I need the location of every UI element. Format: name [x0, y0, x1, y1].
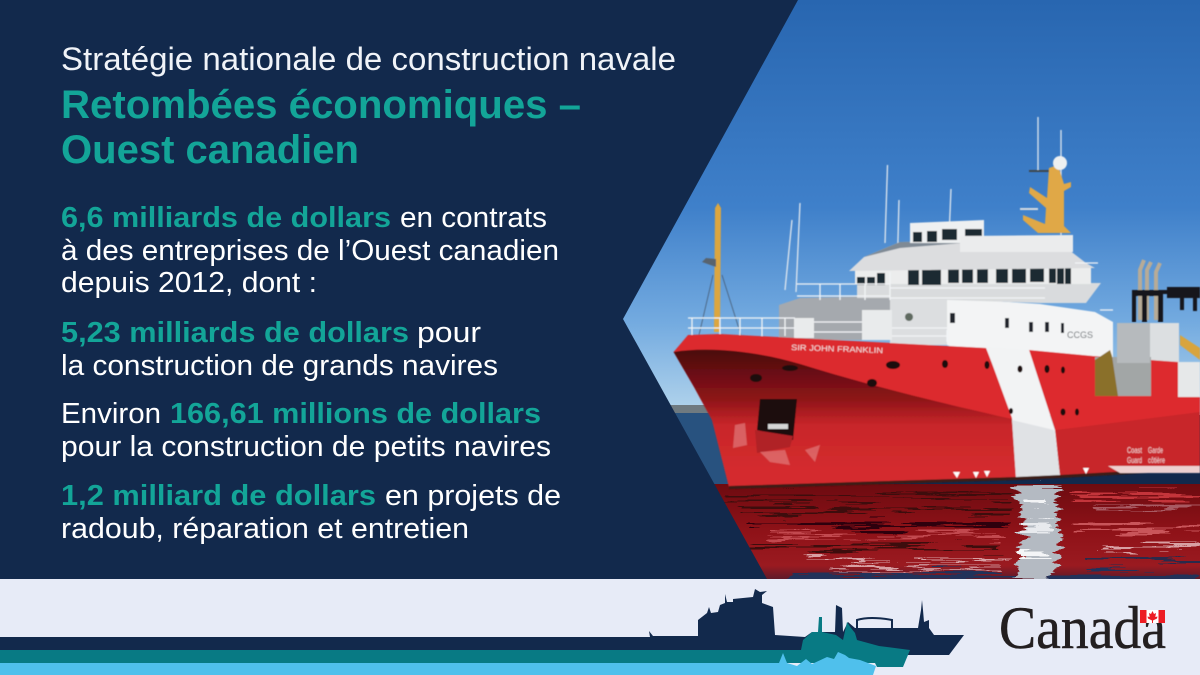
title [61, 83, 581, 172]
anchor pocket [757, 399, 797, 440]
red hull [674, 323, 1200, 489]
distant shoreline [660, 405, 720, 414]
text block: total contracts: depuis 2012, dont : [61, 267, 317, 299]
ship name: SIR JOHN FRANKLIN [791, 343, 883, 355]
text block: refit and repair [61, 480, 561, 545]
text block: total contracts: à des entreprises de l’Ouest canadien [61, 235, 559, 267]
light blue ship silhouette [0, 652, 876, 675]
photo: coast guard ship Sir John Franklin [620, 0, 1200, 582]
yellow crane [1178, 335, 1200, 392]
bow wave at stern [1108, 466, 1200, 473]
yellow radar mast [1020, 156, 1071, 233]
dark platform and frame [1132, 287, 1200, 322]
hull lettering: Guard [1127, 456, 1142, 465]
water reflection [660, 484, 1200, 582]
main white block [947, 298, 1113, 365]
Canada wordmark: Canada [999, 595, 1166, 661]
wheelhouse [910, 220, 984, 243]
title: Retombées économiques – [61, 83, 581, 127]
porthole [905, 313, 913, 321]
hull lettering [1127, 446, 1165, 465]
windows on white hull [950, 313, 1064, 333]
shaded bow [674, 350, 1018, 487]
blue water [660, 413, 740, 493]
boot topping line [729, 467, 1200, 489]
bridge roof [849, 240, 1095, 271]
grey forward block [779, 296, 890, 340]
text block: refit and repair: radoub, réparation et entretien [61, 513, 469, 545]
sky [620, 0, 1200, 415]
railings [688, 263, 1113, 342]
navy chevron panel [0, 0, 798, 579]
text block: small vessels [61, 398, 551, 463]
bridge deck [857, 283, 1101, 303]
fore mast [699, 203, 741, 335]
text block: small vessels: Environ [61, 398, 161, 430]
hull lettering: Garde [1148, 446, 1163, 455]
footer band [0, 579, 1200, 675]
lower hull shade right [1056, 412, 1200, 476]
text block: small vessels: pour la construction de petits navires [61, 431, 551, 463]
lettering on superstructure: CCGS [1067, 330, 1093, 340]
navy ship silhouette [0, 589, 964, 655]
text block: total contracts: 6,6 milliards de dollars [61, 202, 391, 234]
text block: total contracts: en contrats [400, 202, 547, 234]
portholes on hull [750, 360, 1079, 416]
title: Ouest canadien [61, 128, 359, 172]
funnels [1140, 260, 1160, 320]
white stripe [986, 347, 1060, 478]
text block: large vessels: la construction de grands navires [61, 350, 498, 382]
navy crane arch [857, 618, 892, 628]
text block: refit and repair: en projets de [385, 480, 561, 512]
bridge windows band [855, 266, 1091, 285]
white deck over bridge [960, 235, 1073, 252]
hull lettering: côtière [1148, 456, 1165, 465]
Canadian flag [1140, 610, 1165, 623]
text block: large vessels [61, 317, 498, 382]
subtitle: Stratégie nationale de construction navale [61, 41, 676, 77]
text block: large vessels: pour [417, 317, 481, 349]
text block: total contracts [61, 202, 559, 299]
faded paint patches [733, 423, 820, 465]
light grey midship block [890, 296, 947, 345]
text block: refit and repair: 1,2 milliard de dollars [61, 480, 376, 512]
antennas [785, 117, 1061, 292]
white deck boxes [794, 310, 892, 340]
ship superstructure [674, 117, 1200, 489]
hull lettering: Coast [1127, 446, 1143, 455]
stern superstructure [1117, 323, 1179, 363]
fleet silhouettes [0, 589, 964, 675]
text block: small vessels: 166,61 millions de dollars [170, 398, 541, 430]
text block: large vessels: 5,23 milliards de dollars [61, 317, 409, 349]
teal ship silhouette [0, 617, 910, 667]
draft marks [953, 468, 1089, 478]
